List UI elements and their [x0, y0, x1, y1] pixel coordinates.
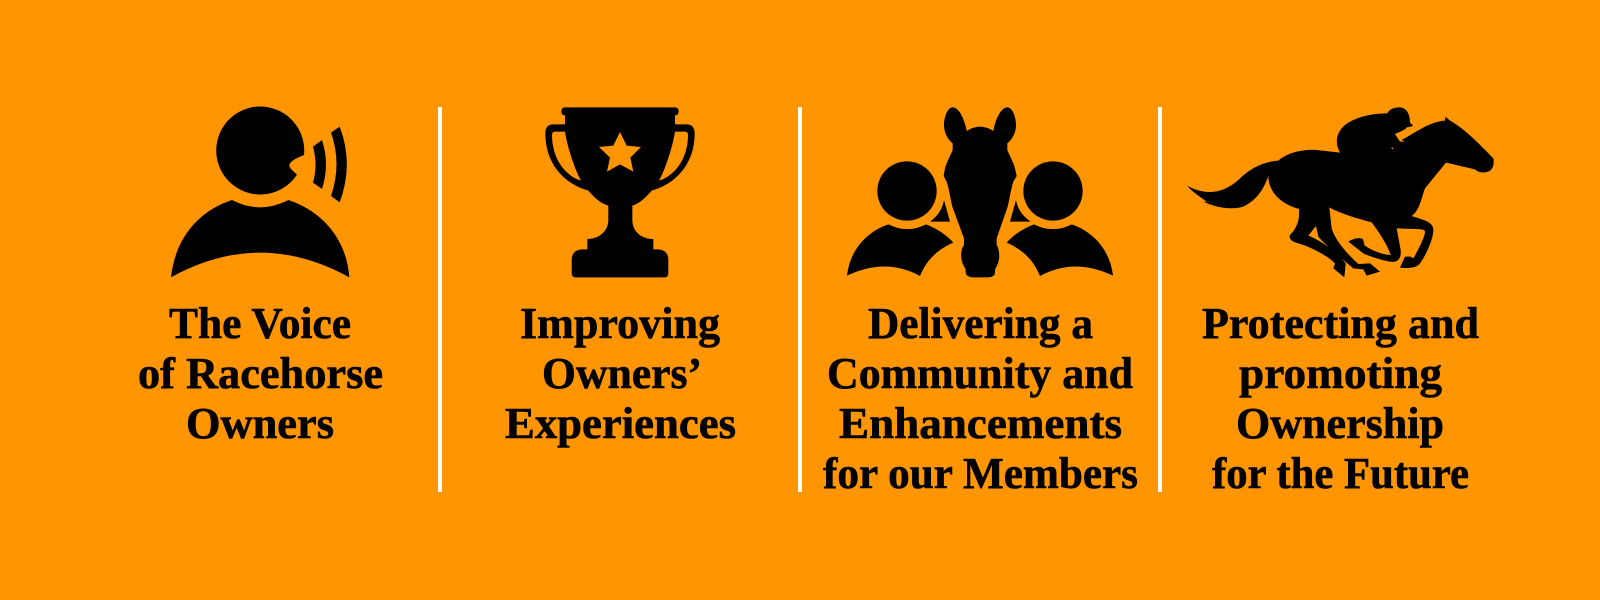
- panel: protecting and promoting ownership: [1187, 107, 1494, 498]
- heading: The Voice of Racehorse Owners: Owners: [186, 399, 334, 448]
- heading: Delivering a Community and Enhancements for our Members: Community and: [827, 349, 1133, 398]
- heading: Delivering a Community and Enhancements for our Members: Enhancements: [839, 399, 1122, 448]
- heading: Delivering a Community and Enhancements for our Members: Delivering a: [868, 299, 1093, 348]
- panel: improving owners' experiences: [505, 107, 736, 448]
- heading: Delivering a Community and Enhancements for our Members: [823, 299, 1138, 498]
- icon: trophy with star: [545, 107, 695, 277]
- heading: Protecting and promoting Ownership for the Future: [1202, 299, 1479, 498]
- heading: Protecting and promoting Ownership for the Future: Ownership: [1236, 399, 1444, 448]
- panel: delivering a community: [823, 107, 1138, 498]
- heading: Improving Owners' Experiences: Improving: [520, 299, 720, 348]
- panel: voice of racehorse owners: [138, 107, 383, 448]
- icon: speaking person: [171, 107, 349, 277]
- heading: Improving Owners' Experiences: Owners’: [542, 349, 702, 398]
- heading: The Voice of Racehorse Owners: The Voice: [169, 299, 351, 348]
- heading: Protecting and promoting Ownership for the Future: for the Future: [1212, 449, 1469, 498]
- icon: racehorse and jockey: [1187, 107, 1494, 277]
- heading: Improving Owners' Experiences: [505, 299, 736, 448]
- heading: The Voice of Racehorse Owners: [138, 299, 383, 448]
- heading: Delivering a Community and Enhancements for our Members: for our Members: [823, 449, 1138, 498]
- heading: The Voice of Racehorse Owners: of Racehorse: [138, 349, 383, 398]
- heading: Protecting and promoting Ownership for the Future: promoting: [1239, 349, 1442, 398]
- heading: Protecting and promoting Ownership for the Future: Protecting and: [1202, 299, 1479, 348]
- icon: horse head with two people: [847, 107, 1113, 277]
- heading: Improving Owners' Experiences: Experiences: [505, 399, 736, 448]
